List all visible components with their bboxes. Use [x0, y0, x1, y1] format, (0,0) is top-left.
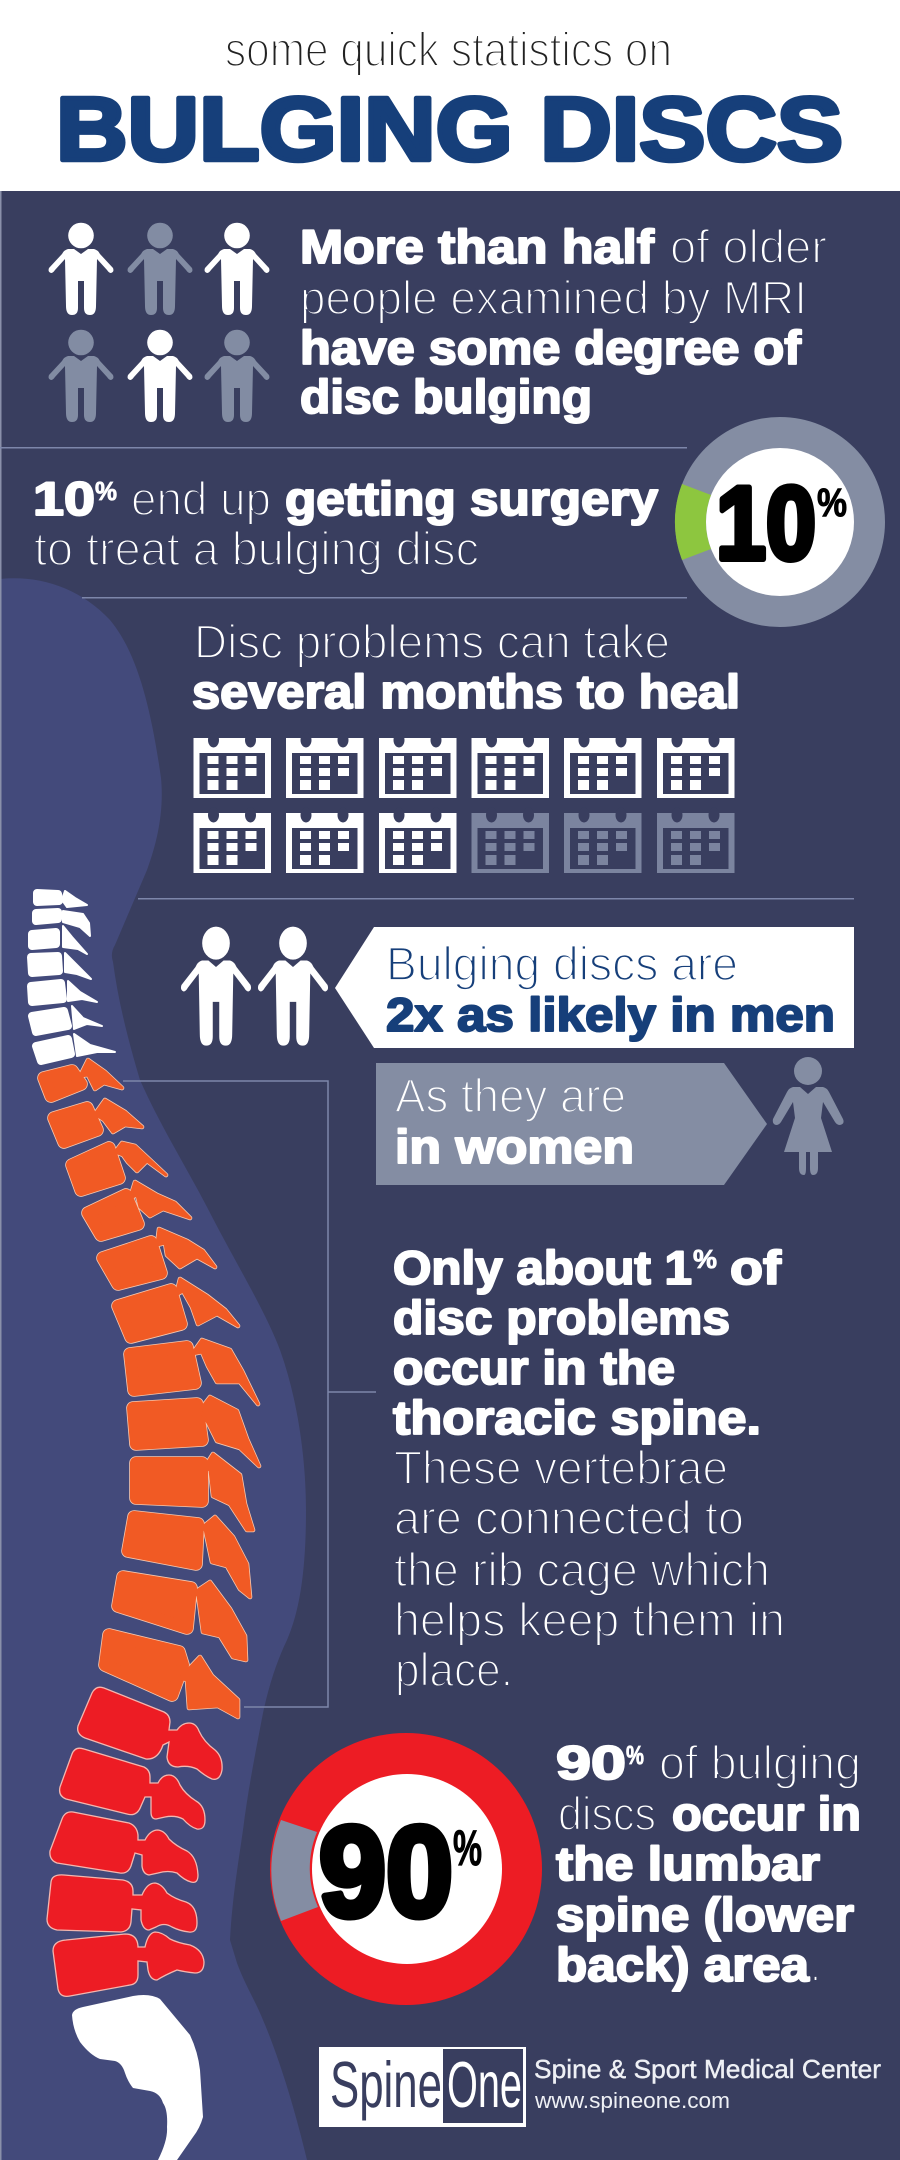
spine background silhouette — [0, 578, 307, 2160]
stat text — [300, 220, 827, 423]
callout: as they are in women: As they are — [395, 1069, 626, 1122]
stat: thoracic spine: disc problems — [393, 1291, 730, 1344]
stat: thoracic spine: % — [693, 1244, 717, 1274]
donut chart: 90 percent — [270, 1733, 542, 2005]
stat: 10% end up getting surgery — [33, 472, 658, 575]
callout: 2x as likely in men: 2x as likely in men — [386, 988, 835, 1041]
stat: 10% end up getting surgery: to treat a bulging disc — [34, 522, 479, 575]
stat text: have some degree of — [300, 321, 801, 374]
stat: 90 percent lumbar: % — [626, 1740, 644, 1770]
people icons: 3 of 6 highlighted — [49, 223, 269, 422]
stat: 10% end up getting surgery: getting surgery — [285, 472, 658, 525]
lumbar vertebrae: red — [47, 1687, 222, 1996]
men icons — [181, 927, 328, 1046]
stat: 10% end up getting surgery: end up — [131, 472, 271, 525]
callout: as they are in women — [376, 1063, 767, 1185]
stat: thoracic spine: helps keep them in — [394, 1593, 785, 1646]
donut chart: 10 percent: % — [817, 481, 847, 525]
stat: thoracic spine: the rib cage which — [394, 1543, 770, 1596]
stat: months to heal: Disc problems can take — [194, 615, 670, 668]
header: title: BULGING DISCS — [56, 80, 843, 180]
logo: SpineOne: Spine — [330, 2048, 442, 2121]
stat: 90 percent lumbar: 90 — [556, 1736, 626, 1789]
stat: 90 percent lumbar: back) area — [556, 1938, 810, 1991]
callout: 2x as likely in men — [335, 927, 854, 1048]
logo tagline and url — [534, 2054, 881, 2113]
donut chart: 10 percent — [675, 417, 885, 627]
stat: 10% end up getting surgery: 10 — [33, 472, 95, 525]
logo: SpineOne: One — [447, 2048, 522, 2121]
cervical vertebrae: white — [31, 891, 115, 1061]
thoracic bracket lines — [123, 1081, 376, 1707]
donut chart: 10 percent: 10 — [716, 466, 816, 582]
donut chart: 90 percent: % — [453, 1820, 482, 1876]
callout: as they are in women: in women — [395, 1120, 634, 1173]
stat: months to heal — [192, 615, 740, 718]
stat: thoracic spine: thoracic spine. — [393, 1391, 761, 1444]
logo tagline and url: Spine & Sport Medical Center — [534, 2054, 881, 2084]
stat: thoracic spine — [393, 1241, 785, 1696]
stat: thoracic spine: occur in the — [393, 1341, 675, 1394]
stat text: More than half — [300, 220, 654, 273]
stat: 90 percent lumbar: spine (lower — [556, 1888, 854, 1941]
stat: 90 percent lumbar: the lumbar — [556, 1837, 820, 1890]
woman icon — [773, 1057, 844, 1175]
donut chart: 90 percent: 90 — [319, 1801, 453, 1944]
stat: thoracic spine: are connected to — [394, 1491, 744, 1544]
stat: thoracic spine: Only about 1 — [393, 1241, 692, 1294]
stat: thoracic spine: These vertebrae — [394, 1441, 728, 1494]
stat: 90 percent lumbar: discs — [558, 1787, 656, 1840]
calendar icons: 9 of 12 months — [194, 732, 734, 873]
logo tagline and url: www.spineone.com — [534, 2088, 730, 2113]
thoracic vertebrae: orange — [44, 1060, 259, 1717]
stat: more than half of older people — [49, 220, 827, 423]
stat text: of older — [670, 220, 827, 273]
stat: 90 percent lumbar: of bulging — [659, 1736, 861, 1789]
sacrum: white — [72, 1995, 203, 2160]
stat: 90 percent lumbar — [556, 1736, 861, 1991]
stat text: people examined by MRI — [300, 271, 807, 324]
stat: 90 percent lumbar: occur in — [672, 1787, 861, 1840]
callout: 2x as likely in men: Bulging discs are — [386, 937, 738, 990]
stat: 10% end up getting surgery: % — [95, 476, 117, 506]
stat: thoracic spine: place. — [395, 1643, 513, 1696]
stat: months to heal: several months to heal — [192, 665, 740, 718]
stat: thoracic spine: of — [730, 1241, 781, 1294]
stat text: disc bulging — [300, 370, 592, 423]
stat: 90 percent lumbar: . — [811, 1938, 820, 1991]
header: intro line: some quick statistics on — [225, 24, 672, 77]
spine illustration — [31, 891, 259, 2160]
